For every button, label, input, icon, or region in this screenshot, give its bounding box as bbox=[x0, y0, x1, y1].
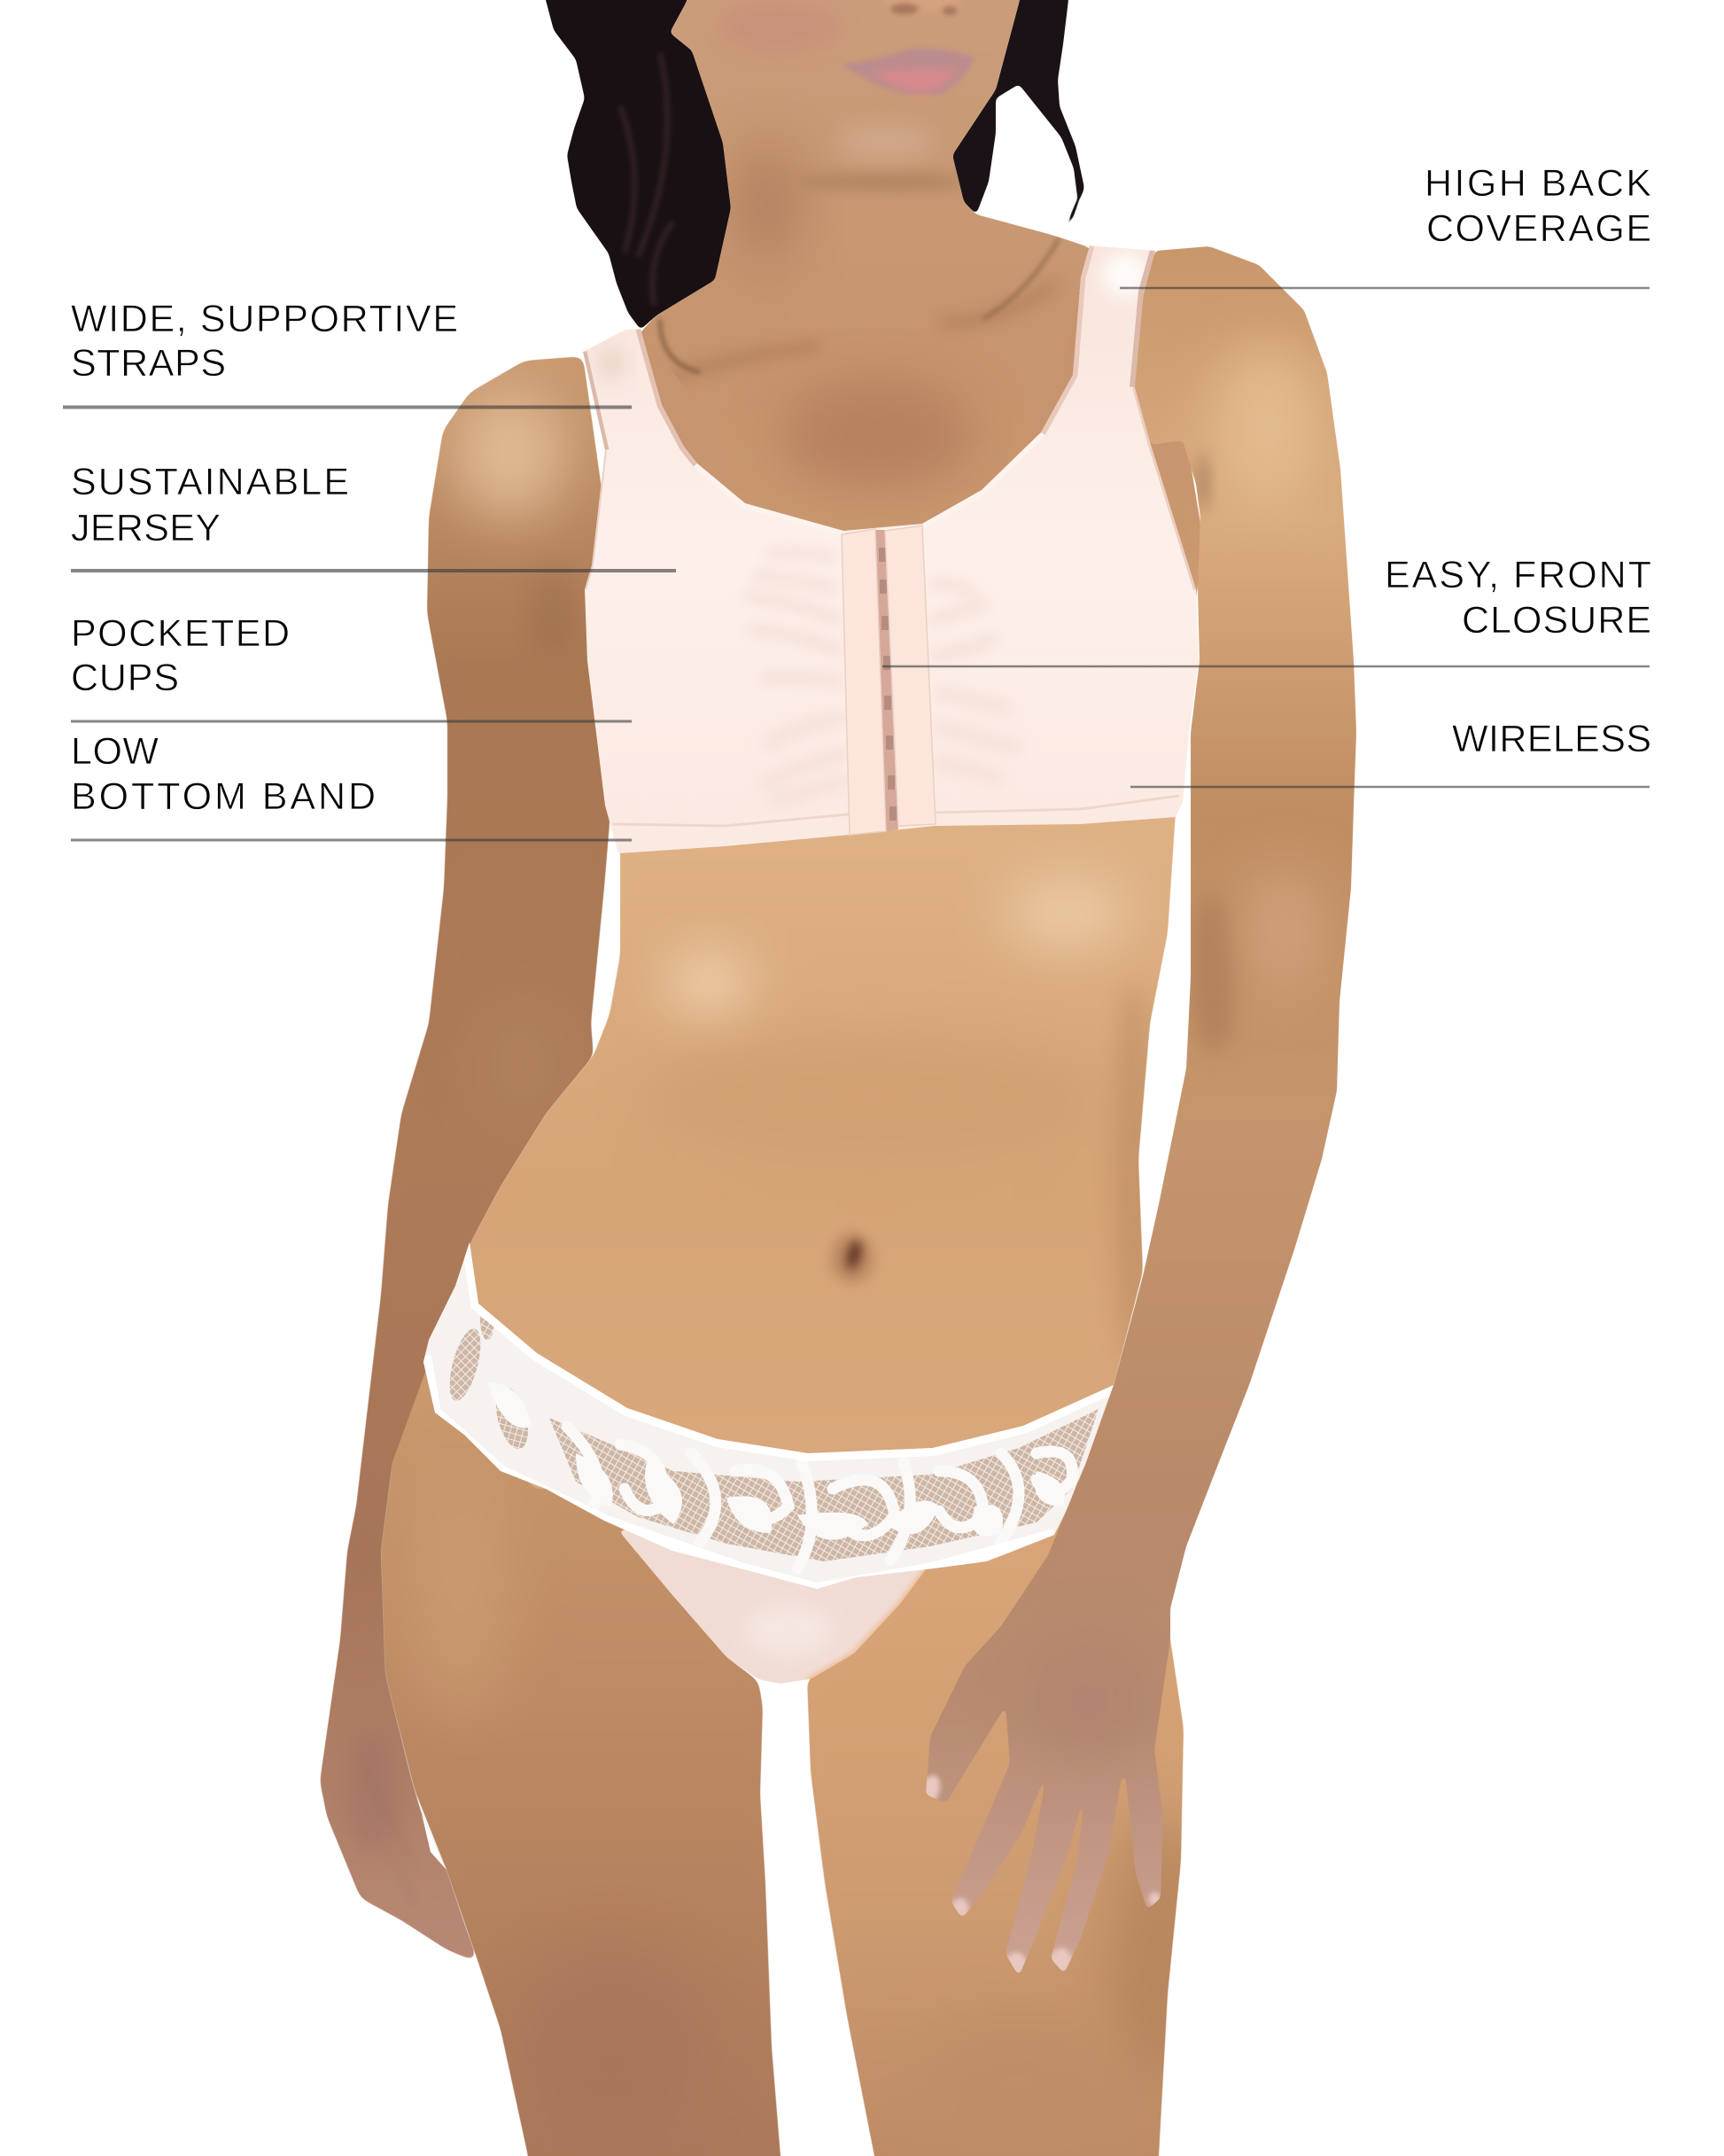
leader line bbox=[1130, 786, 1650, 788]
strap and neckline trim bbox=[583, 245, 1196, 826]
callout: wide, supportive straps bbox=[63, 298, 632, 408]
left arm and hand bbox=[310, 354, 629, 1967]
label text: WIRELESS bbox=[1452, 718, 1651, 760]
callout: pocketed cups bbox=[71, 612, 632, 721]
torso bbox=[452, 230, 1214, 1515]
label text: CLOSURE bbox=[1462, 599, 1651, 642]
label text: CUPS bbox=[71, 657, 179, 699]
right placket bbox=[885, 525, 936, 826]
leader line bbox=[1120, 287, 1650, 289]
label text: STRAPS bbox=[71, 342, 226, 385]
hair bbox=[537, 0, 1084, 330]
label text: BOTTOM BAND bbox=[71, 775, 376, 818]
right arm and hand bbox=[921, 239, 1364, 1976]
leader line bbox=[71, 720, 632, 723]
ruching folds bbox=[744, 552, 1019, 802]
label text bbox=[1385, 554, 1651, 642]
nose tip and nostrils bbox=[881, 0, 961, 15]
label text: JERSEY bbox=[71, 507, 221, 549]
leader line bbox=[63, 406, 632, 409]
chest shading bbox=[780, 381, 975, 487]
lace mesh patches bbox=[450, 1308, 528, 1449]
callout: sustainable jersey bbox=[71, 461, 676, 571]
callout: high back coverage bbox=[1120, 162, 1651, 288]
label text: SUSTAINABLE bbox=[71, 461, 349, 503]
label text: WIDE, SUPPORTIVE bbox=[71, 298, 458, 340]
label text: HIGH BACK bbox=[1425, 162, 1651, 205]
left placket bbox=[842, 529, 886, 835]
label text: EASY, FRONT bbox=[1385, 554, 1651, 596]
bra body bbox=[576, 230, 1214, 868]
label text: COVERAGE bbox=[1426, 207, 1651, 250]
label text: LOW bbox=[71, 730, 159, 773]
label text bbox=[71, 730, 376, 818]
bra bbox=[576, 230, 1214, 868]
leader line bbox=[71, 838, 632, 842]
model figure wearing the bra bbox=[310, 0, 1364, 2156]
lace floral swirls bbox=[567, 1427, 1072, 1568]
callout: low bottom band bbox=[71, 730, 632, 840]
briefs fabric bbox=[618, 1506, 975, 1684]
hook closure strip bbox=[874, 530, 898, 831]
neck and lower face bbox=[642, 0, 1086, 380]
lace mesh band bbox=[549, 1409, 1099, 1561]
lace waistband bbox=[416, 1241, 1125, 1595]
right thigh bbox=[807, 1480, 1184, 2156]
lips bbox=[840, 48, 975, 95]
fingernails bbox=[922, 1774, 1160, 1975]
left thigh bbox=[372, 1356, 797, 2156]
label text: POCKETED bbox=[71, 612, 290, 655]
leader line bbox=[882, 665, 1650, 667]
gap between left hand and thigh bbox=[422, 1814, 447, 1870]
label text bbox=[71, 612, 290, 699]
leader line bbox=[71, 569, 676, 572]
navel bbox=[831, 1234, 874, 1283]
label text bbox=[1425, 162, 1651, 250]
label text bbox=[71, 461, 349, 549]
callout: easy, front closure bbox=[882, 554, 1651, 666]
lace floral motifs bbox=[487, 1382, 1065, 1540]
label text bbox=[71, 298, 458, 385]
